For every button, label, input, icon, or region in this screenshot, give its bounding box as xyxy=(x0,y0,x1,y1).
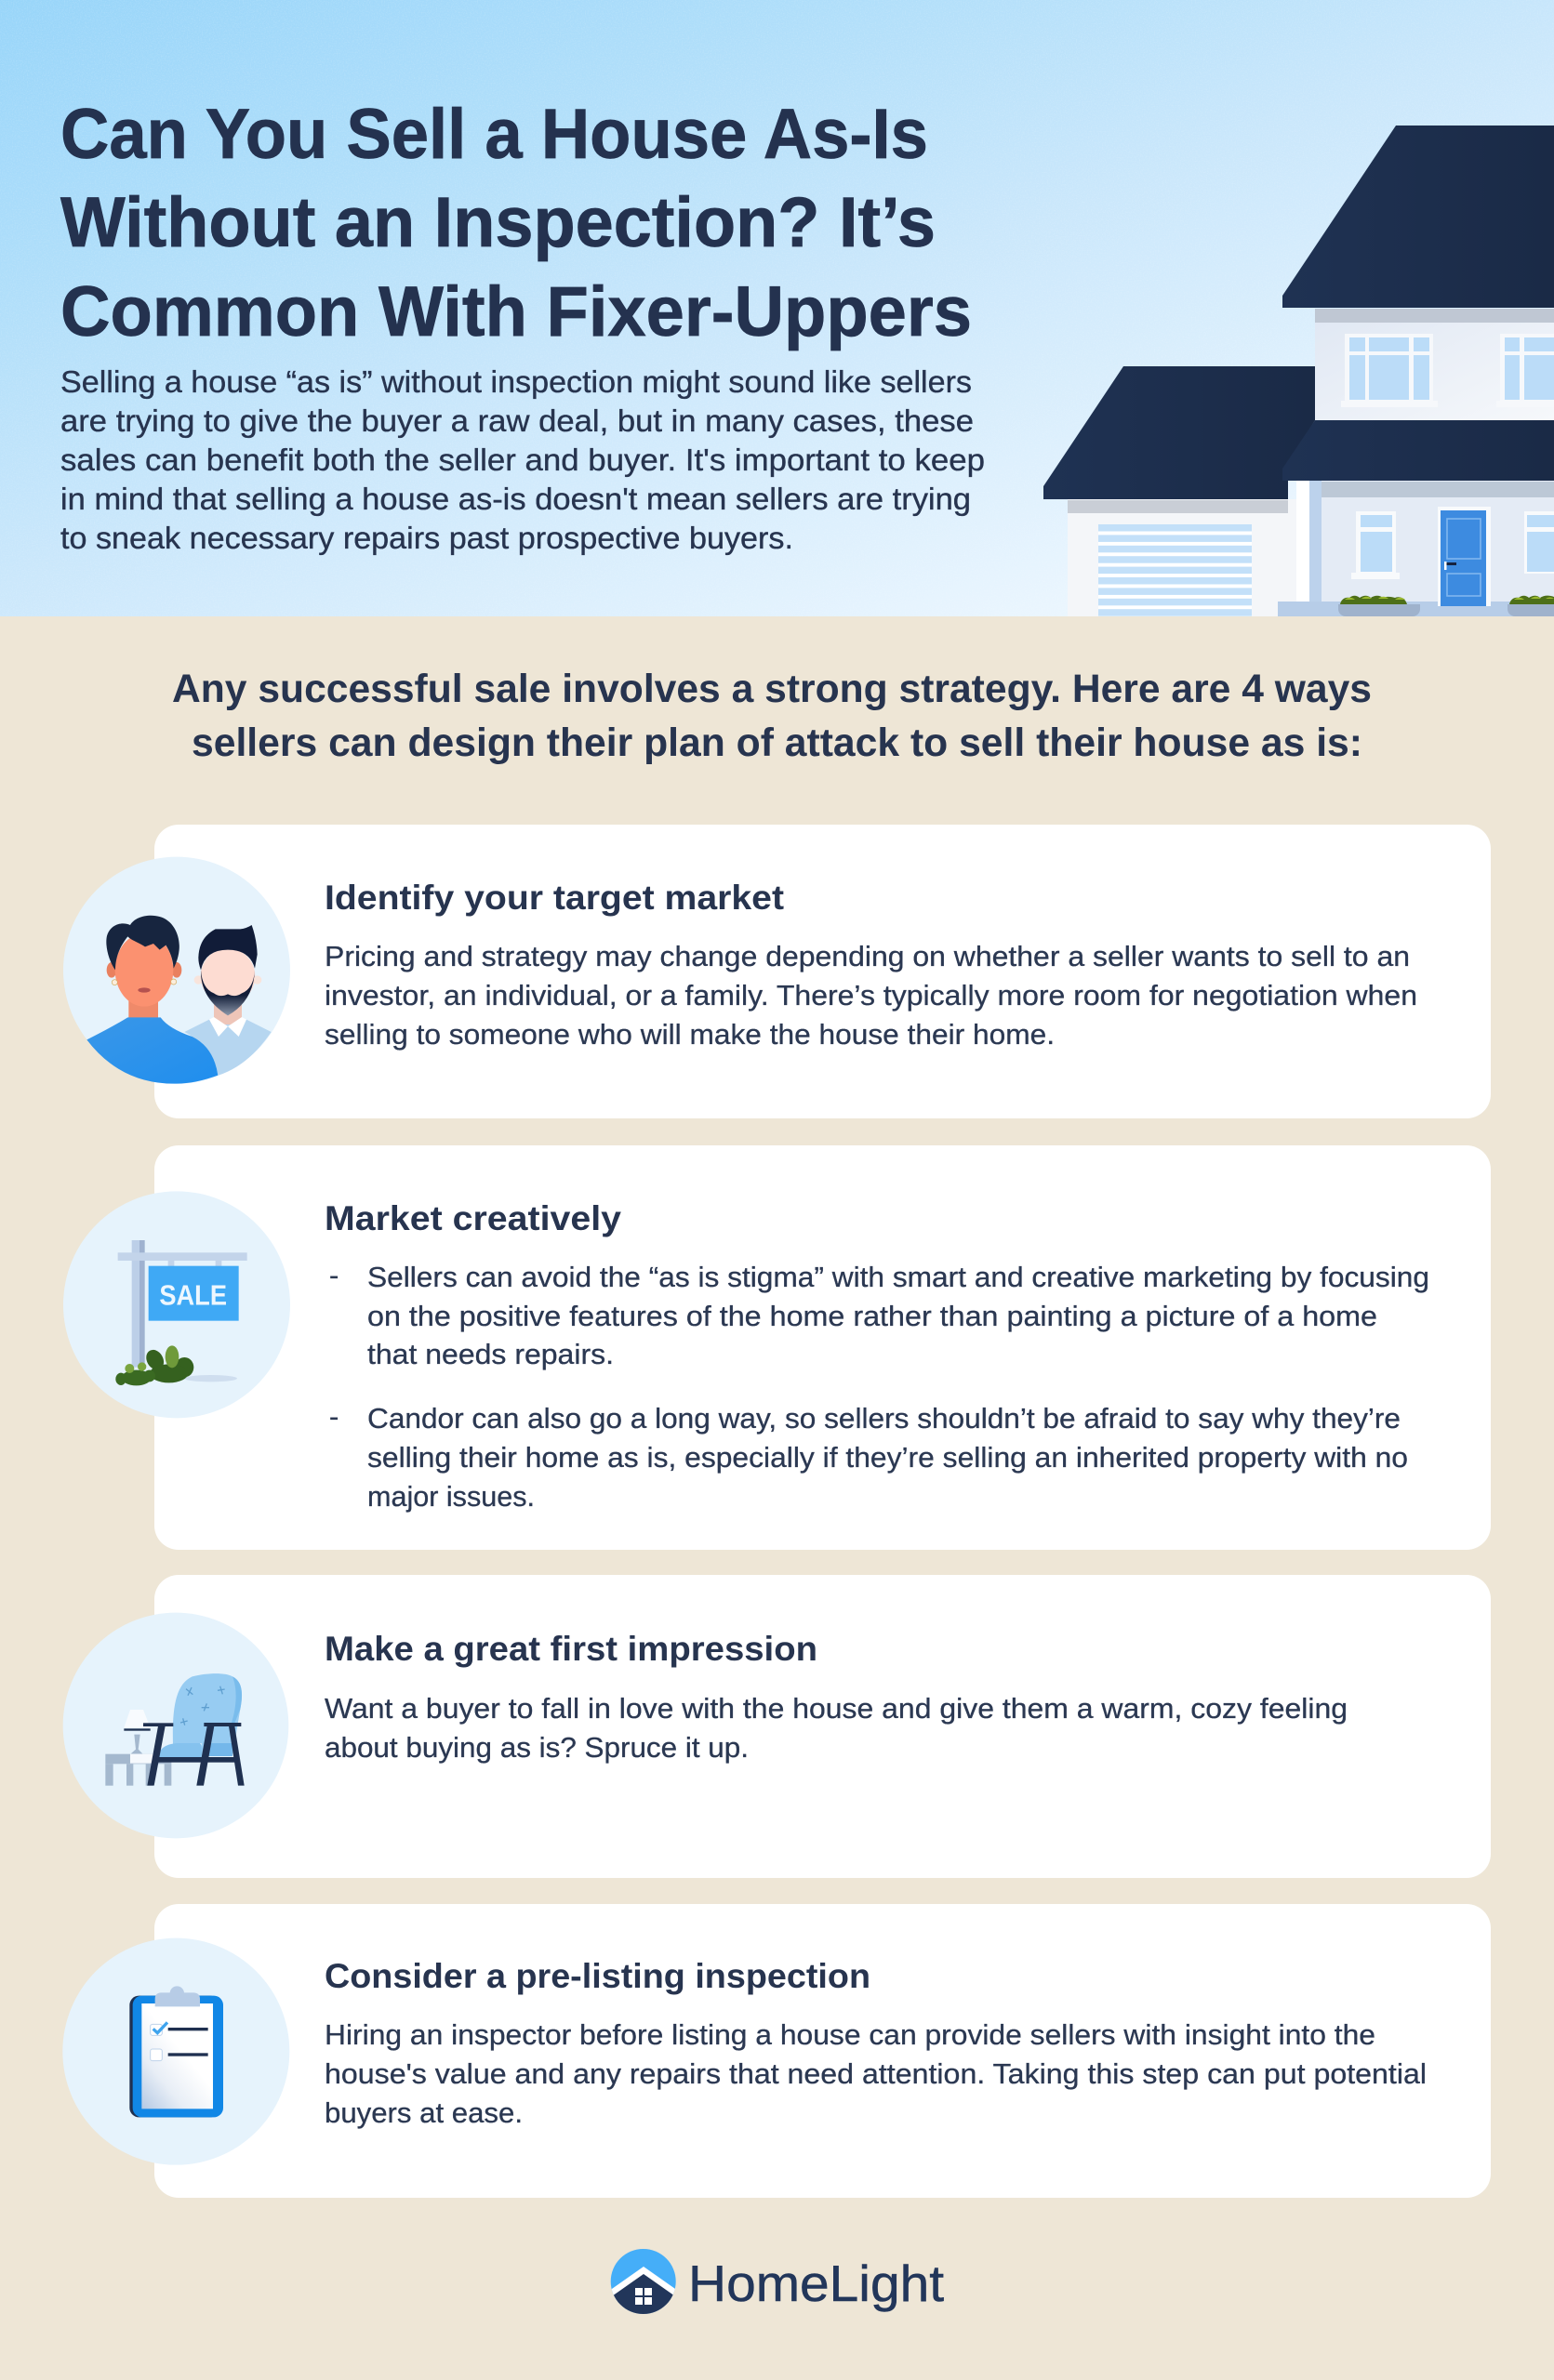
title: Common With Fixer-Uppers xyxy=(60,272,972,351)
card body text: selling to someone who will make the house their home. xyxy=(325,1018,1055,1051)
sign board xyxy=(149,1266,239,1321)
card body text: house's value and any repairs that need attention. Taking this step can put potential xyxy=(325,2057,1427,2090)
bullet two xyxy=(329,1400,1408,1513)
main roof xyxy=(1282,126,1554,308)
intro text: in mind that selling a house as-is doesn't mean sellers are trying xyxy=(60,482,971,516)
panel: make a great first impression xyxy=(63,1575,1491,1878)
subheading xyxy=(172,667,1372,765)
card background xyxy=(154,1575,1491,1878)
lower window right xyxy=(1524,511,1554,574)
panel: consider a pre-listing inspection xyxy=(62,1904,1491,2198)
icon: armchair and lamp xyxy=(63,1613,288,1838)
bullet two: Candor can also go a long way, so sellers shouldn’t be afraid to say why they’re xyxy=(367,1402,1401,1435)
panel: identify your target market xyxy=(63,825,1491,1118)
ground shadow xyxy=(184,1375,237,1382)
garage roof shadow band xyxy=(1068,500,1288,513)
subheading: sellers can design their plan of attack to sell their house as is: xyxy=(192,721,1362,765)
intro text: Selling a house “as is” without inspection might sound like sellers xyxy=(60,364,972,399)
bullet two: selling their home as is, especially if they’re selling an inherited property with no xyxy=(367,1441,1408,1474)
bullet one: Sellers can avoid the “as is stigma” with smart and creative marketing by focusing xyxy=(367,1261,1429,1293)
man xyxy=(184,925,272,1076)
card heading: Make a great first impression xyxy=(325,1630,817,1668)
intro text: to sneak necessary repairs past prospective buyers. xyxy=(60,521,793,555)
card heading: Market creatively xyxy=(325,1199,621,1237)
sign post xyxy=(118,1240,247,1368)
armchair xyxy=(143,1673,245,1786)
logo: HomeLight xyxy=(609,2248,944,2317)
icon: clipboard checklist xyxy=(62,1938,289,2165)
card body text: Pricing and strategy may change depending on whether a seller wants to sell to an xyxy=(325,940,1410,972)
planter right xyxy=(1508,596,1554,616)
bullet one: that needs repairs. xyxy=(367,1338,614,1370)
icon: couple xyxy=(63,857,290,1084)
clipboard board xyxy=(129,1996,223,2117)
logo mark xyxy=(609,2248,678,2317)
intro text xyxy=(60,364,985,555)
card body text: buyers at ease. xyxy=(325,2096,523,2129)
card body text: Want a buyer to fall in love with the house and give them a warm, cozy feeling xyxy=(325,1692,1348,1725)
checked item xyxy=(151,2022,208,2035)
card body text: about buying as is? Spruce it up. xyxy=(325,1731,749,1764)
icon: for sale sign xyxy=(63,1191,290,1418)
garage wall xyxy=(1068,499,1296,616)
card body text: investor, an individual, or a family. There’s typically more room for negotiation when xyxy=(325,979,1417,1012)
lower wall xyxy=(1322,481,1554,602)
title: Can You Sell a House As-Is xyxy=(60,95,928,174)
planter left xyxy=(1338,596,1420,616)
intro text: sales can benefit both the seller and buyer. It's important to keep xyxy=(60,443,985,477)
bullet one: - xyxy=(329,1259,339,1291)
sign label: SALE xyxy=(159,1279,227,1311)
bullet one: on the positive features of the home rather than painting a picture of a home xyxy=(367,1300,1377,1332)
front door xyxy=(1438,507,1491,606)
woman xyxy=(86,916,218,1084)
porch base xyxy=(1278,602,1554,616)
intro text: are trying to give the buyer a raw deal, but in many cases, these xyxy=(60,403,974,438)
upper roof shadow band xyxy=(1315,309,1554,323)
card background xyxy=(154,1145,1491,1550)
upper window left xyxy=(1341,334,1438,407)
clipboard clip xyxy=(155,1986,200,2006)
logo wordmark: HomeLight xyxy=(688,2254,944,2312)
upper wall xyxy=(1315,309,1554,420)
card heading: Identify your target market xyxy=(325,879,784,917)
subheading: Any successful sale involves a strong strategy. Here are 4 ways xyxy=(172,667,1372,711)
lamp xyxy=(124,1710,153,1764)
card background xyxy=(154,1904,1491,2198)
sky background xyxy=(0,0,1554,616)
porch column xyxy=(1296,481,1322,602)
title xyxy=(60,95,972,351)
middle roof xyxy=(1282,420,1554,481)
card heading: Consider a pre-listing inspection xyxy=(325,1957,870,1995)
card body text xyxy=(325,1692,1348,1764)
panel: market creatively xyxy=(63,1145,1491,1550)
sky grain xyxy=(0,0,1554,616)
bullet two: major issues. xyxy=(367,1480,535,1513)
panel: header xyxy=(0,0,1554,616)
card body text xyxy=(325,2018,1427,2129)
house illustration xyxy=(1043,126,1554,616)
bullet one xyxy=(329,1259,1429,1370)
bullet two: - xyxy=(329,1400,339,1433)
bushes xyxy=(115,1345,193,1385)
lower window left xyxy=(1351,511,1400,579)
title: Without an Inspection? It’s xyxy=(60,183,936,262)
upper window right xyxy=(1496,334,1554,407)
side table xyxy=(105,1754,171,1786)
unchecked item xyxy=(151,2049,208,2061)
card body text: Hiring an inspector before listing a house can provide sellers with insight into the xyxy=(325,2018,1375,2051)
card background xyxy=(154,825,1491,1118)
garage door xyxy=(1098,524,1252,616)
garage roof xyxy=(1043,366,1315,499)
lower shadow band xyxy=(1322,482,1554,497)
card body text xyxy=(325,940,1417,1051)
